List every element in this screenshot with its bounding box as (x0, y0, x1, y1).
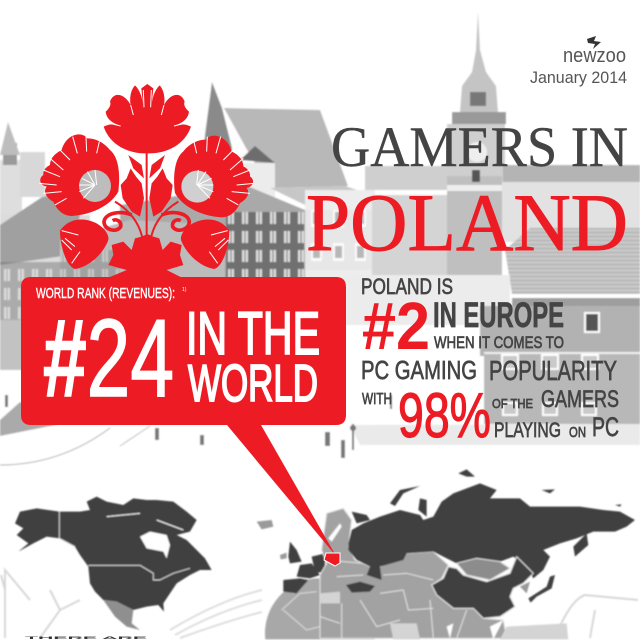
world map (15, 469, 635, 639)
in the: IN THE (186, 300, 320, 367)
plaza figures (0, 395, 392, 465)
trees and right-hand roofs (346, 165, 640, 445)
date: January 2014 (530, 68, 627, 87)
of the: OF THE (492, 396, 533, 411)
with: WITH (362, 391, 392, 408)
rank #2: #2 (362, 289, 430, 364)
top flower (104, 84, 191, 153)
folk flower emblem (39, 84, 254, 278)
cropped heading: there are: THERE ARE (25, 636, 147, 640)
PC: PC (592, 412, 619, 442)
98 percent: 98% (398, 381, 491, 451)
in Europe: IN EUROPE (433, 296, 564, 335)
right carnation (174, 136, 254, 217)
map: North America (dark) (15, 497, 273, 630)
bottom leaves (107, 234, 183, 278)
map: Russia, China and Turkey (dark) (346, 469, 635, 618)
map: Poland highlighted (324, 553, 340, 566)
map: Europe and Africa (grey) (265, 542, 375, 639)
playing: PLAYING (494, 419, 561, 442)
scroll spirals (104, 213, 189, 230)
left carnation (39, 134, 119, 216)
footnote mark: 1) (182, 287, 187, 293)
map: Asia and Scandinavia (grey) (320, 508, 568, 639)
world rank label: WORLD RANK (REVENUES): (36, 286, 175, 302)
PC gaming: PC GAMING (361, 355, 477, 385)
lower petals (60, 219, 229, 269)
left buildings (0, 122, 90, 436)
on: ON (569, 424, 586, 441)
when it comes to: WHEN IT COMES TO (434, 333, 564, 352)
world: WORLD (188, 355, 318, 413)
text block: PC gaming popularity (361, 274, 619, 451)
title: Poland: POLAND (306, 177, 628, 268)
clock tower (447, 12, 506, 280)
title: Gamers in: GAMERS IN (331, 116, 628, 179)
faint tree and sea map background (1, 570, 638, 638)
callout: world rank speech bubble (21, 277, 346, 556)
heading: date and publisher (530, 36, 627, 87)
bubble body with tail (21, 277, 346, 556)
central church and houses (60, 82, 375, 285)
newzoo wordmark: newzoo (563, 45, 626, 67)
center tulips and leaves (121, 155, 173, 217)
Poland is: POLAND IS (361, 274, 453, 299)
icon: newzoo logo (587, 36, 601, 49)
rank number: #24 (43, 297, 174, 420)
stems (115, 152, 178, 273)
